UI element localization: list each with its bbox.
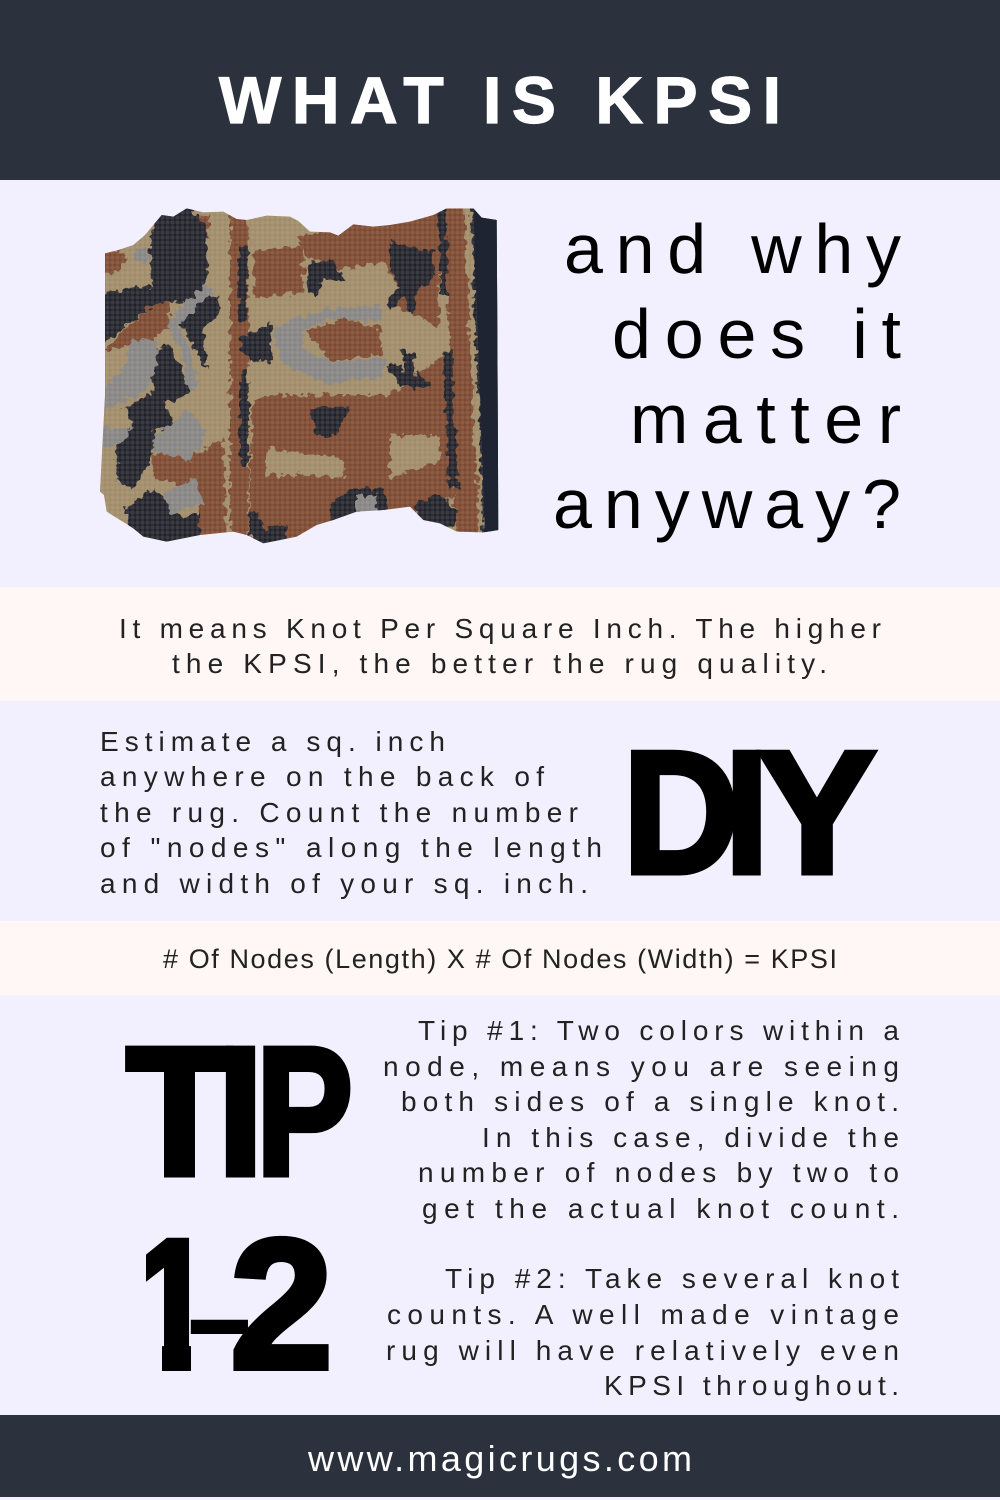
tip 2 text: counts. A well made vintage xyxy=(387,1299,899,1330)
tip 2 text xyxy=(386,1263,899,1401)
header band xyxy=(0,0,1000,180)
tip 1 text: Tip #1: Two colors within a xyxy=(418,1015,899,1046)
DIY instructions text: and width of your sq. inch. xyxy=(100,868,588,899)
DIY heading: I xyxy=(725,714,768,910)
DIY instructions text: Estimate a sq. inch xyxy=(100,726,445,757)
DIY heading: Y xyxy=(758,714,876,910)
1-2 heading: - xyxy=(182,1250,257,1384)
TIP heading: P xyxy=(256,1008,353,1214)
tip 1 text xyxy=(383,1015,899,1224)
DIY instructions text: anywhere on the back of xyxy=(100,761,544,792)
definition text xyxy=(119,613,881,679)
definition text: the KPSI, the better the rug quality. xyxy=(172,648,827,679)
tip 1 text: node, means you are seeing xyxy=(383,1051,899,1082)
definition text: It means Knot Per Square Inch. The higher xyxy=(119,613,881,644)
tip 1 text: get the actual knot count. xyxy=(422,1193,899,1224)
tip 1 text: number of nodes by two to xyxy=(418,1157,899,1188)
subtitle: and why does it matter anyway?: and why xyxy=(564,210,901,288)
1-2 heading: 1 xyxy=(132,1202,214,1408)
DIY instructions text: of "nodes" along the length xyxy=(100,832,602,863)
band: formula xyxy=(0,921,1000,995)
DIY instructions text: the rug. Count the number xyxy=(100,797,578,828)
tip 1 text: both sides of a single knot. xyxy=(401,1086,899,1117)
footer band xyxy=(0,1415,1000,1497)
tip 1 text: In this case, divide the xyxy=(482,1122,899,1153)
tip 2 text: Tip #2: Take several knot xyxy=(445,1263,899,1294)
TIP heading: I xyxy=(218,1008,264,1214)
1-2 heading xyxy=(128,1202,333,1408)
subtitle: and why does it matter anyway?: matter xyxy=(630,380,901,458)
tip 2 text: KPSI throughout. xyxy=(604,1370,899,1401)
title: WHAT IS KPSI xyxy=(219,63,781,137)
band: definition of KPSI xyxy=(0,587,1000,701)
subtitle: and why does it matter anyway?: anyway? xyxy=(553,465,901,543)
DIY heading: D xyxy=(623,714,739,910)
tip 2 text: rug will have relatively even xyxy=(386,1335,899,1366)
image: rug fragment xyxy=(100,208,498,544)
subtitle: and why does it matter anyway? xyxy=(553,210,901,543)
subtitle: and why does it matter anyway?: does it xyxy=(612,295,901,373)
formula text: # Of Nodes (Length) X # Of Nodes (Width) = KPSI xyxy=(163,944,837,974)
DIY instructions text xyxy=(100,726,602,899)
TIP heading: T xyxy=(126,1008,233,1214)
1-2 heading: 2 xyxy=(230,1202,333,1408)
website url: www.magicrugs.com xyxy=(307,1438,692,1479)
